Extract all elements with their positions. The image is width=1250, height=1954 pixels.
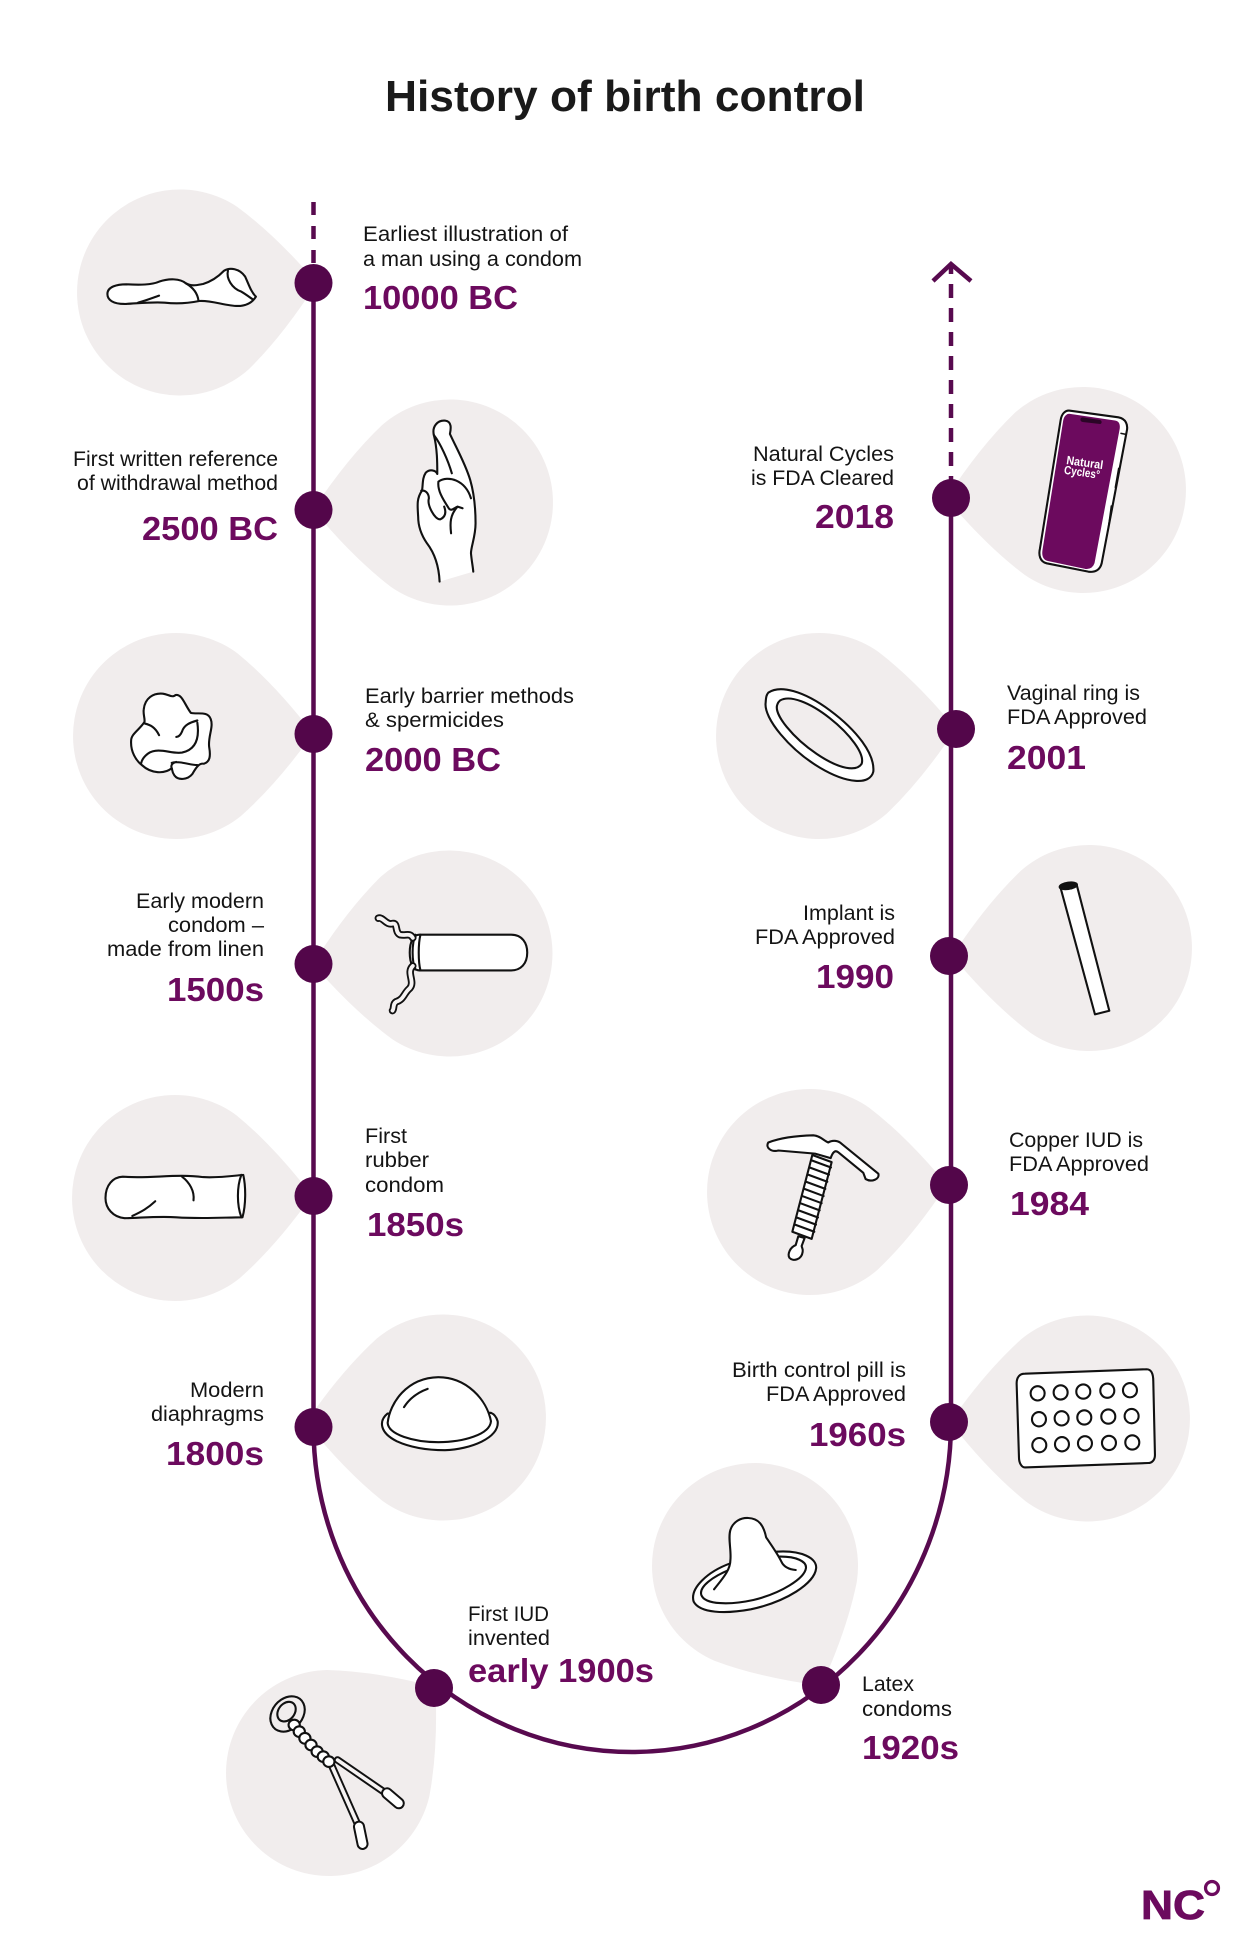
milestone: 1920s bbox=[615, 1426, 959, 1766]
phone screen text: Cycles° bbox=[1063, 463, 1101, 482]
icon: implant bbox=[1059, 881, 1109, 1014]
dot bbox=[937, 710, 975, 748]
dot bbox=[294, 715, 332, 753]
bubble bbox=[302, 1311, 550, 1525]
label: 1500s bbox=[167, 971, 264, 1008]
label: 1800s bbox=[166, 1435, 264, 1472]
label: 1960s bbox=[809, 1416, 906, 1453]
bubble bbox=[70, 180, 324, 402]
label: Early barrier methods bbox=[365, 685, 574, 708]
label: FDA Approved bbox=[766, 1383, 906, 1406]
icon: first IUD bbox=[265, 1694, 399, 1844]
label: 1920s bbox=[862, 1729, 959, 1766]
milestone: 1850s bbox=[70, 1093, 464, 1303]
label bbox=[107, 890, 264, 1008]
dot bbox=[930, 937, 968, 975]
label: 1990 bbox=[816, 958, 894, 995]
label: made from linen bbox=[107, 938, 264, 961]
dot bbox=[930, 1166, 968, 1204]
label: 2000 BC bbox=[365, 741, 501, 778]
label: First bbox=[365, 1125, 407, 1148]
label bbox=[365, 1125, 464, 1243]
label: FDA Approved bbox=[1007, 706, 1147, 729]
icon: diaphragm bbox=[382, 1377, 498, 1450]
label bbox=[751, 443, 894, 535]
icon: sponge bbox=[131, 694, 212, 779]
icon: linen condom bbox=[378, 918, 527, 1011]
label: Early modern bbox=[136, 890, 264, 913]
icon: phone with Natural Cycles app bbox=[1039, 411, 1127, 572]
label: First written reference bbox=[73, 448, 278, 471]
logo: NC bbox=[1141, 1882, 1205, 1928]
bubble bbox=[308, 394, 558, 613]
label bbox=[468, 1603, 654, 1689]
label: Modern bbox=[190, 1379, 264, 1402]
label: 1984 bbox=[1010, 1185, 1090, 1222]
label: Implant is bbox=[803, 902, 895, 925]
bubble bbox=[184, 1607, 500, 1918]
bubble bbox=[711, 626, 961, 844]
dot bbox=[932, 479, 970, 517]
label bbox=[151, 1379, 264, 1472]
label: 10000 BC bbox=[363, 279, 518, 316]
bubble bbox=[615, 1426, 912, 1736]
label: rubber bbox=[365, 1149, 429, 1172]
label: First IUD bbox=[468, 1603, 549, 1626]
icon: rubber condom bbox=[105, 1175, 245, 1218]
dot bbox=[294, 945, 332, 983]
milestone: 2001 bbox=[711, 626, 1147, 844]
label bbox=[862, 1673, 959, 1766]
label bbox=[365, 685, 574, 778]
dot bbox=[294, 1408, 332, 1446]
bubble bbox=[940, 381, 1192, 601]
icon: condom illustration bbox=[107, 269, 256, 306]
label bbox=[732, 1359, 906, 1453]
icon: vaginal ring bbox=[766, 689, 873, 781]
title: History of birth control bbox=[385, 72, 865, 121]
label: a man using a condom bbox=[363, 248, 582, 271]
label bbox=[1009, 1129, 1149, 1222]
label: Vaginal ring is bbox=[1007, 682, 1140, 705]
label: FDA Approved bbox=[1009, 1153, 1149, 1176]
label: 2001 bbox=[1007, 739, 1086, 776]
timeline line bbox=[314, 202, 971, 1752]
icon: pill pack bbox=[1017, 1369, 1155, 1467]
label: condoms bbox=[862, 1698, 952, 1721]
label: invented bbox=[468, 1627, 550, 1650]
bubble bbox=[305, 843, 560, 1067]
label: Latex bbox=[862, 1673, 915, 1696]
icon: latex condom bbox=[693, 1518, 816, 1612]
milestone: 1990 bbox=[755, 839, 1198, 1059]
label: early 1900s bbox=[468, 1652, 654, 1689]
phone screen text bbox=[1063, 453, 1104, 482]
label: condom – bbox=[168, 914, 264, 937]
milestone: 2018 bbox=[751, 381, 1192, 601]
label: Copper IUD is bbox=[1009, 1129, 1143, 1152]
label: 1850s bbox=[367, 1206, 464, 1243]
bubble bbox=[947, 1313, 1193, 1525]
milestone: 1500s bbox=[107, 843, 560, 1067]
label bbox=[1007, 682, 1147, 776]
milestone: 2000 BC bbox=[71, 631, 574, 841]
label: FDA Approved bbox=[755, 926, 895, 949]
label: is FDA Cleared bbox=[751, 467, 894, 490]
dot bbox=[802, 1666, 840, 1704]
label bbox=[755, 902, 895, 995]
milestone: 1960s bbox=[732, 1313, 1193, 1525]
bubble bbox=[71, 631, 315, 841]
milestone: 1800s bbox=[151, 1311, 550, 1525]
milestone: early 1900s bbox=[184, 1603, 654, 1918]
label: of withdrawal method bbox=[77, 472, 278, 495]
milestone: 1984 bbox=[702, 1082, 1149, 1300]
dot bbox=[294, 264, 332, 302]
label bbox=[73, 448, 278, 547]
bubble bbox=[702, 1082, 952, 1300]
label: Earliest illustration of bbox=[363, 223, 568, 246]
label bbox=[363, 223, 582, 316]
label: Natural Cycles bbox=[753, 443, 894, 466]
bubble bbox=[70, 1093, 314, 1303]
label: & spermicides bbox=[365, 709, 504, 732]
label: Birth control pill is bbox=[732, 1359, 906, 1382]
dot bbox=[415, 1669, 453, 1707]
label: 2018 bbox=[815, 498, 894, 535]
dot bbox=[930, 1403, 968, 1441]
label: condom bbox=[365, 1174, 444, 1197]
dot bbox=[294, 491, 332, 529]
milestone: 2500 BC bbox=[73, 394, 558, 613]
milestone: 10000 BC bbox=[70, 180, 582, 402]
dot bbox=[294, 1177, 332, 1215]
phone screen text: Natural bbox=[1066, 453, 1104, 472]
label: diaphragms bbox=[151, 1403, 264, 1426]
icon: copper IUD bbox=[767, 1135, 879, 1260]
bubble bbox=[946, 839, 1198, 1059]
icon: crossed fingers bbox=[418, 421, 476, 582]
label: 2500 BC bbox=[142, 510, 278, 547]
